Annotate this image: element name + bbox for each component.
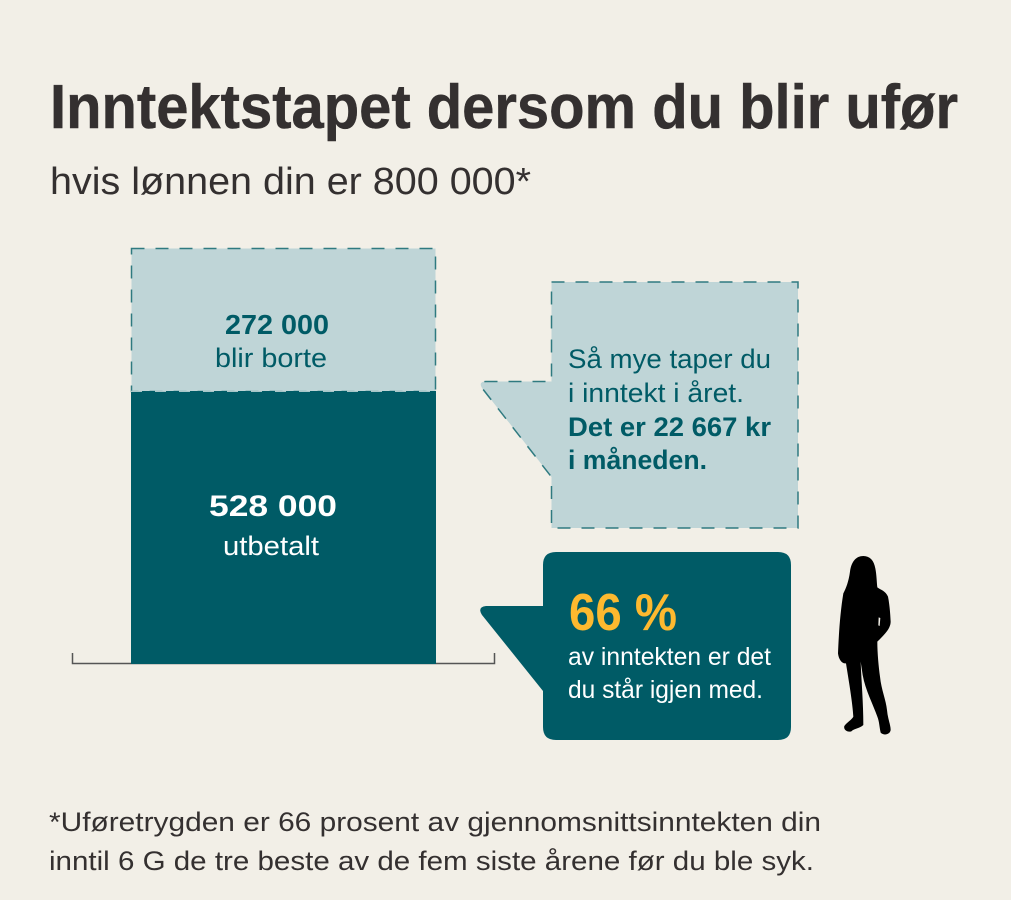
label: 272 000: 272 000 (225, 309, 329, 340)
label: 528 000: 528 000 (209, 490, 337, 523)
callout text: du står igjen med. (568, 676, 763, 704)
subtitle: hvis lønnen din er 800 000* (50, 161, 531, 203)
callout text: av inntekten er det (568, 643, 771, 671)
footnote: inntil 6 G de tre beste av de fem siste årene før du ble syk. (49, 846, 814, 876)
icon: person silhouette (838, 556, 891, 734)
label: utbetalt: utbetalt (223, 531, 320, 561)
bar chart (72, 248, 494, 664)
title: Inntektstapet dersom du blir ufør (50, 73, 958, 142)
callout text: Så mye taper du (568, 344, 771, 374)
bar segment: lost income (132, 248, 436, 392)
callout text: i måneden. (568, 445, 707, 475)
callout: 66 percent (480, 552, 791, 740)
callout text: i inntekt i året. (568, 378, 744, 408)
big number: 66 % (569, 584, 677, 642)
bar segment: paid out (131, 391, 436, 664)
footnote: *Uføretrygden er 66 prosent av gjennomsnittsinntekten din (49, 807, 821, 837)
callout text: Det er 22 667 kr (568, 412, 771, 442)
label: blir borte: blir borte (215, 343, 327, 373)
callout: yearly loss (481, 282, 798, 528)
axis baseline (72, 653, 494, 664)
